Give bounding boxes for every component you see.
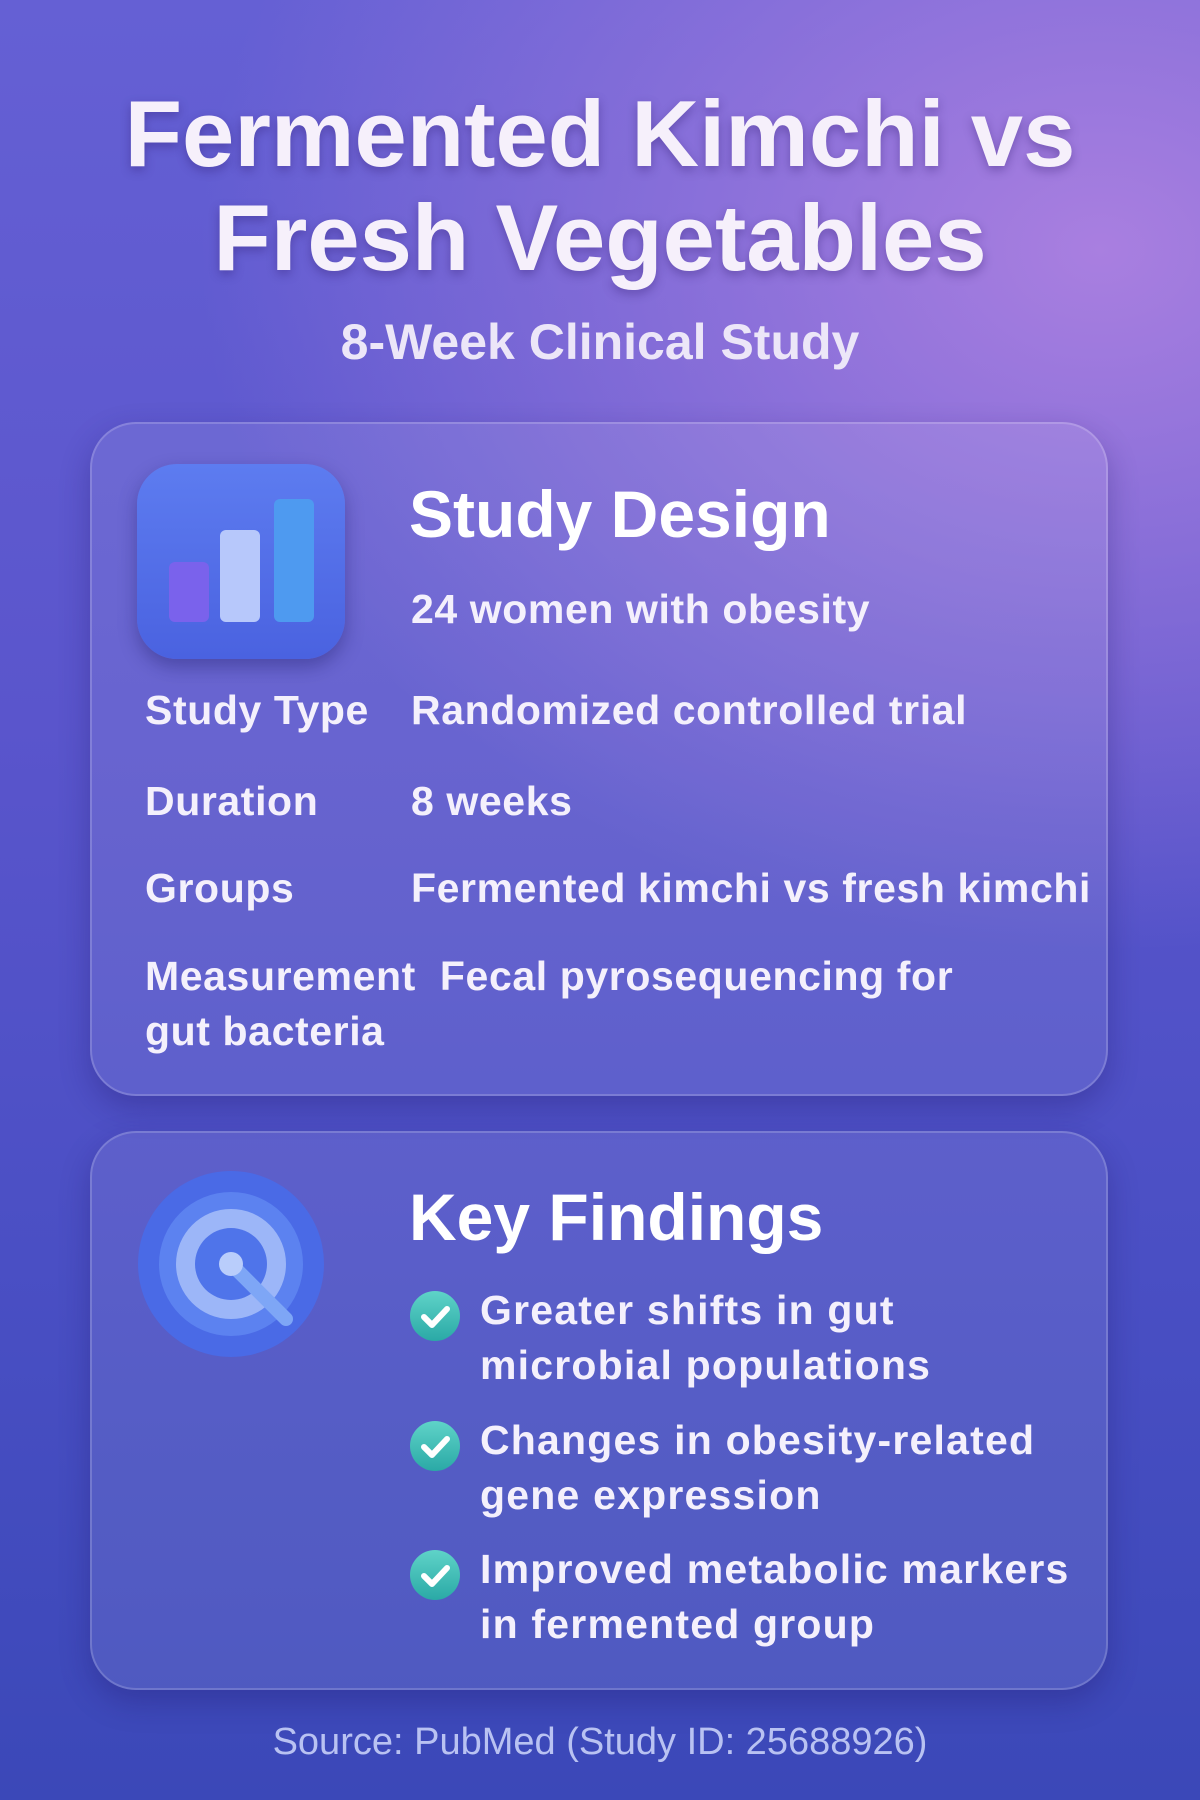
icon: bar chart <box>137 464 345 659</box>
row: duration <box>145 778 572 824</box>
text: participants: 24 women with obesity <box>411 586 870 632</box>
source: Source: PubMed (Study ID: 25688926) <box>273 1721 927 1763</box>
finding 2: gene expression <box>480 1472 822 1518</box>
finding 2 <box>410 1417 1035 1518</box>
row: groups: Groups <box>145 865 294 911</box>
row: groups: Fermented kimchi vs fresh kimchi <box>411 865 1091 911</box>
title: Fermented Kimchi vs <box>125 81 1075 186</box>
finding 3: in fermented group <box>480 1601 875 1647</box>
panel: key findings <box>90 1131 1108 1690</box>
heading: study design: Study Design <box>409 477 831 551</box>
finding 3: Improved metabolic markers <box>480 1546 1070 1592</box>
row: measurement: Measurement Fecal pyrosequencing for <box>145 953 953 999</box>
finding 1: microbial populations <box>480 1342 931 1388</box>
row: measurement: gut bacteria <box>145 1008 385 1054</box>
icon: target <box>138 1171 324 1357</box>
title: Fresh Vegetables <box>213 185 987 290</box>
icon: check <box>410 1421 460 1471</box>
finding 2: Changes in obesity-related <box>480 1417 1035 1463</box>
row: study type: Study Type <box>145 687 369 733</box>
title <box>125 81 1075 298</box>
row: study type <box>145 687 967 733</box>
subtitle: 8-Week Clinical Study <box>341 314 859 370</box>
finding 1 <box>410 1287 931 1388</box>
row: study type: Randomized controlled trial <box>411 687 967 733</box>
row: duration: Duration <box>145 778 318 824</box>
row: duration: 8 weeks <box>411 778 572 824</box>
finding 3 <box>410 1546 1070 1647</box>
icon: check <box>410 1291 460 1341</box>
icon: check <box>410 1550 460 1600</box>
finding 1: Greater shifts in gut <box>480 1287 895 1333</box>
panel: study design <box>90 422 1108 1096</box>
heading: key findings: Key Findings <box>409 1180 823 1254</box>
row: measurement <box>145 953 953 1054</box>
